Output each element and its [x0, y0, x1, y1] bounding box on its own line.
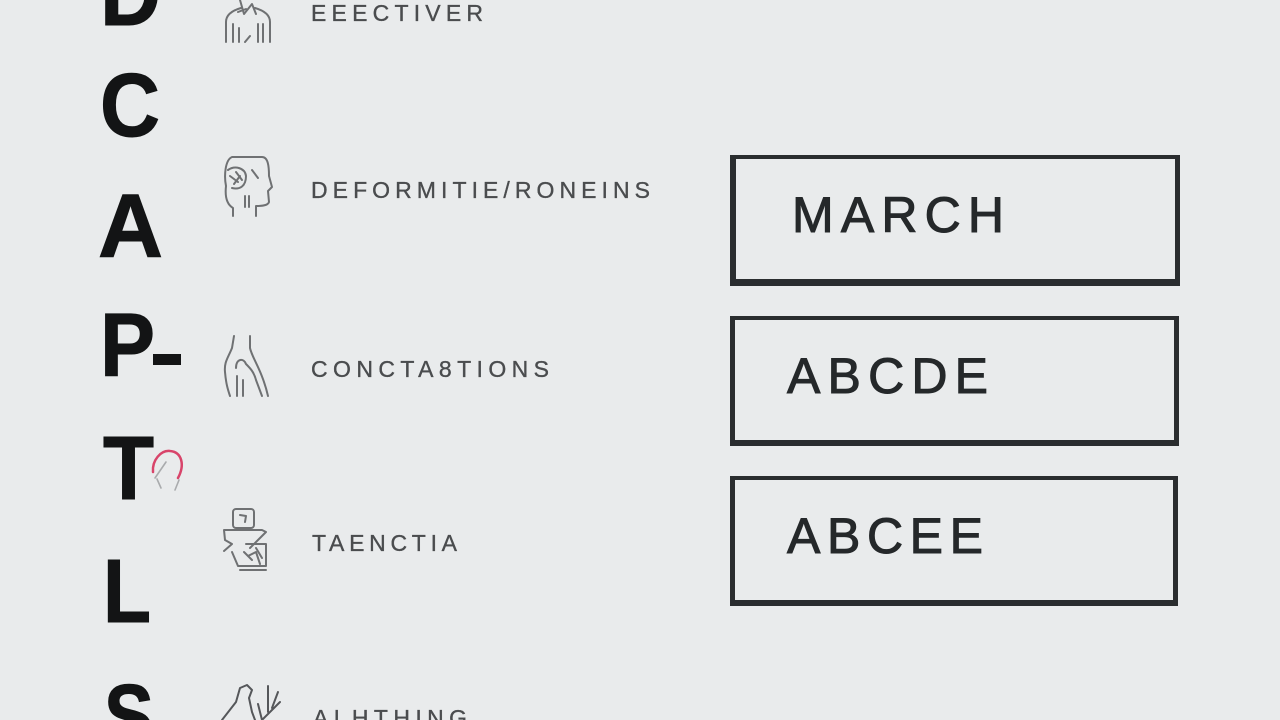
letter L: L	[103, 542, 151, 642]
icon: joint	[225, 336, 268, 396]
letter C: C	[100, 56, 160, 156]
label: deformities: DEFORMITIE/RONEINS	[311, 177, 650, 203]
icon: red arc	[153, 451, 182, 490]
box: ABCEE	[730, 476, 1178, 606]
box: March: MARCH	[792, 187, 1004, 243]
icon: robot figure	[224, 509, 266, 570]
box: ABCDE	[730, 316, 1179, 446]
letter P with dash: P	[100, 296, 155, 396]
icon: hand and branch	[222, 685, 280, 720]
icon: head	[225, 157, 272, 216]
letter A: A	[98, 177, 163, 277]
box: ABCEE: ABCEE	[787, 508, 983, 564]
icon: torso	[226, 0, 270, 42]
letter T: T	[103, 419, 154, 519]
label: contractions: CONCTA8TIONS	[311, 356, 549, 382]
box: ABCDE: ABCDE	[787, 348, 988, 404]
label: effective: EEECTIVER	[311, 0, 483, 26]
box: March	[730, 155, 1180, 286]
label: taenctia: TAENCTIA	[312, 530, 458, 556]
